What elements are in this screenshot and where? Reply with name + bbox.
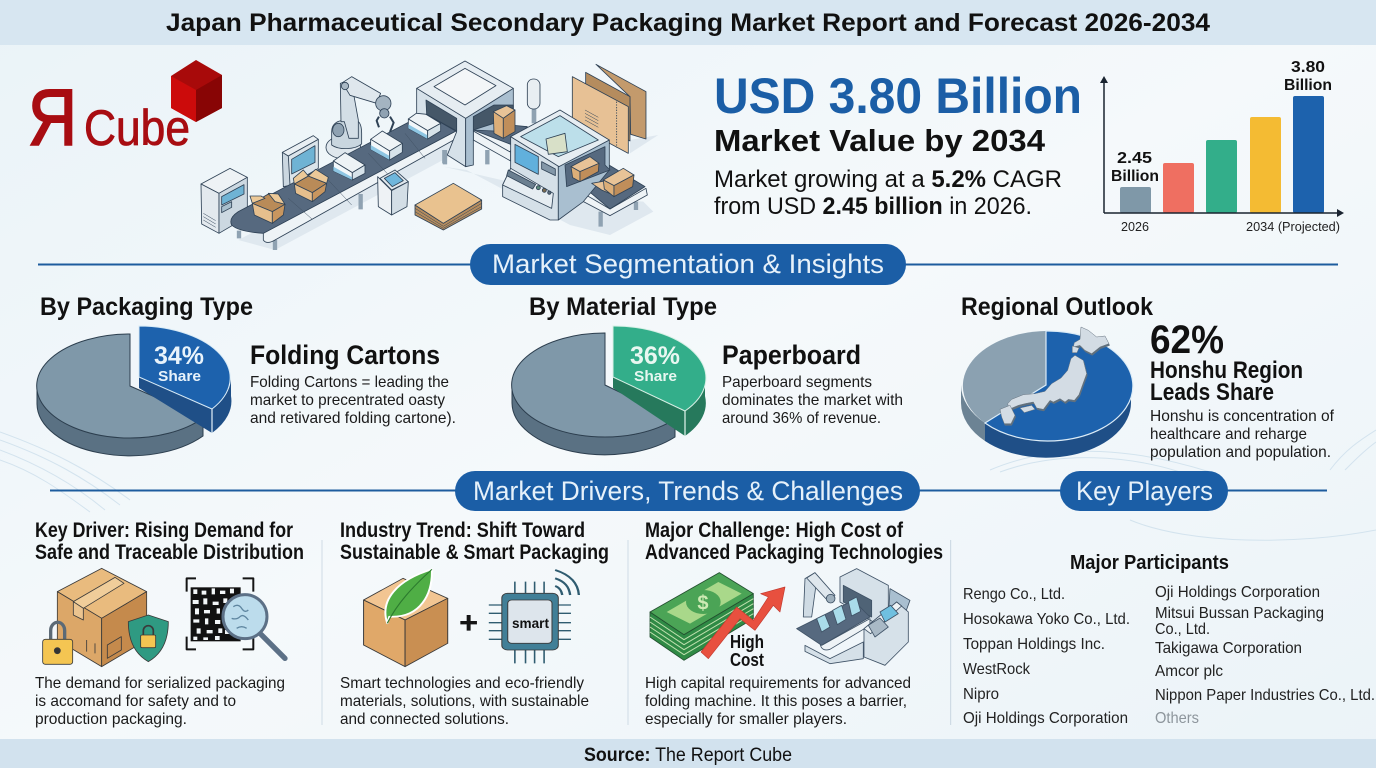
text block: paperboard: Paperboard segments: [722, 374, 872, 391]
heading: regional outlook: Regional Outlook: [961, 293, 1153, 321]
footer source band: [0, 739, 1376, 768]
column: industry trend: Industry Trend: Shift Toward: [340, 519, 585, 542]
section header: drivers and key players: [50, 471, 1327, 511]
column: industry trend: materials, solutions, with sustainable: [340, 693, 589, 710]
pie chart: material type: 36%: [630, 342, 680, 370]
panel: key players list: Nipro: [963, 686, 999, 703]
panel: key players list: Amcor plc: [1155, 663, 1223, 680]
icon: box with locks and QR scan: [43, 568, 285, 667]
panel: key players list: Toppan Holdings Inc.: [963, 636, 1105, 653]
heading: by packaging type: By Packaging Type: [40, 293, 253, 321]
heading: by material type: By Material Type: [529, 293, 717, 321]
column: key driver: Safe and Traceable Distribution: [35, 541, 304, 564]
column: major challenge: High: [730, 632, 764, 652]
panel: key players list: Takigawa Corporation: [1155, 640, 1302, 657]
stat: 62 percent Honshu: [1150, 318, 1335, 461]
column: major challenge: Advanced Packaging Technologies: [645, 541, 943, 564]
column: major challenge: Cost: [730, 650, 764, 670]
pie chart: material type: [512, 326, 706, 455]
stat: 62 percent Honshu: 62%: [1150, 318, 1224, 362]
text block: folding cartons: Folding Cartons = leading the: [250, 374, 449, 391]
column: key driver: Key Driver: Rising Demand for: [35, 519, 293, 542]
pie chart: packaging type: [37, 326, 231, 456]
title band: Japan Pharmaceutical Secondary Packaging Market Report and Forecast 2026-2034: [166, 9, 1210, 37]
column: major challenge: [645, 519, 943, 728]
column: major challenge: especially for smaller players.: [645, 711, 847, 728]
subheadline: market value: Market Value by 2034: [714, 123, 1046, 158]
icon: money stack, rising arrow, machine: [650, 569, 910, 665]
section header: market segmentation: Market Segmentation & Insights: [492, 249, 884, 279]
panel: key players list: [963, 552, 1375, 727]
bar chart: market growth: 3.80: [1291, 59, 1325, 76]
stat: 62 percent Honshu: Honshu Region: [1150, 357, 1303, 384]
section header: drivers and key players: Key Players: [1076, 476, 1213, 506]
bar chart: market growth: 2034 (Projected): [1246, 219, 1340, 234]
column: key driver: The demand for serialized packaging: [35, 675, 285, 692]
text block: folding cartons: and retivared folding cartone).: [250, 410, 456, 427]
bar chart: market growth: Billion: [1111, 168, 1159, 185]
bar chart: market growth: [1100, 59, 1344, 234]
headline: USD 3.80 Billion: USD 3.80 Billion: [714, 68, 1082, 124]
text block: paperboard: dominates the market with: [722, 392, 903, 409]
growth description: [714, 166, 1062, 220]
panel: key players list: Oji Holdings Corporation: [1155, 584, 1320, 601]
bar chart: market growth: Billion: [1284, 77, 1332, 94]
text block: paperboard: around 36% of revenue.: [722, 410, 881, 427]
title band: [0, 0, 1376, 45]
conveyor section with robot and boxes: [201, 77, 462, 250]
panel: key players list: WestRock: [963, 661, 1031, 678]
section header: market segmentation: [38, 244, 1338, 285]
panel: key players list: Others: [1155, 710, 1199, 727]
machine section with tunnel, cartons and inspection unit: [415, 61, 658, 235]
column: key driver: is accomand for safety and to: [35, 693, 236, 710]
illustration: packaging production line: [201, 61, 658, 250]
column: major challenge: folding machine. It this poses a barrier,: [645, 693, 907, 710]
column: industry trend: [340, 519, 609, 728]
bar chart: market growth: 2.45: [1117, 150, 1152, 167]
text block: paperboard: Paperboard: [722, 340, 861, 370]
bar chart: market growth: 2026: [1121, 219, 1149, 234]
stat: 62 percent Honshu: Honshu is concentration of: [1150, 408, 1335, 425]
pie chart: packaging type: 34%: [154, 342, 204, 370]
logo: RCube: Я: [28, 73, 77, 162]
panel: key players list: Major Participants: [1070, 552, 1229, 574]
column: industry trend: Smart technologies and eco-friendly: [340, 675, 584, 692]
column: key driver: [35, 519, 304, 728]
logo: RCube: Cube: [84, 100, 190, 156]
logo: RCube: [28, 60, 222, 162]
column: industry trend: smart: [512, 615, 549, 631]
panel: key players list: Oji Holdings Corporation: [963, 710, 1128, 727]
pie chart: packaging type: Share: [158, 368, 201, 385]
panel: key players list: Rengo Co., Ltd.: [963, 586, 1065, 603]
column: major challenge: High capital requirements for advanced: [645, 675, 911, 692]
stat: 62 percent Honshu: healthcare and reharge: [1150, 426, 1307, 443]
column: industry trend: Sustainable & Smart Packaging: [340, 541, 609, 564]
text block: folding cartons: Folding Cartons: [250, 340, 440, 370]
panel: key players list: Co., Ltd.: [1155, 621, 1210, 638]
pie chart: regional share with Japan map: [961, 327, 1133, 458]
footer source band: Source: The Report Cube: [584, 745, 792, 766]
growth description: Market growing at a 5.2% CAGR: [714, 166, 1062, 193]
section header: drivers and key players: Market Drivers, Trends & Challenges: [473, 476, 903, 506]
column: major challenge: Major Challenge: High Cost of: [645, 519, 904, 542]
icon: money stack, rising arrow, machine: $: [697, 592, 708, 614]
stat: 62 percent Honshu: population and population.: [1150, 444, 1331, 461]
stat: 62 percent Honshu: Leads Share: [1150, 379, 1274, 406]
icon: eco box plus smart chip: [364, 569, 579, 667]
growth description: from USD 2.45 billion in 2026.: [714, 193, 1032, 220]
panel: key players list: Mitsui Bussan Packaging: [1155, 605, 1324, 622]
icon: Japan map: [1000, 327, 1110, 425]
column: industry trend: and connected solutions.: [340, 711, 509, 728]
panel: key players list: Hosokawa Yoko Co., Ltd.: [963, 611, 1130, 628]
text block: paperboard: [722, 340, 903, 427]
pie chart: material type: Share: [634, 368, 677, 385]
text block: folding cartons: market to precentrated oasty: [250, 392, 445, 409]
text block: folding cartons: [250, 340, 456, 427]
column: key driver: production packaging.: [35, 711, 187, 728]
